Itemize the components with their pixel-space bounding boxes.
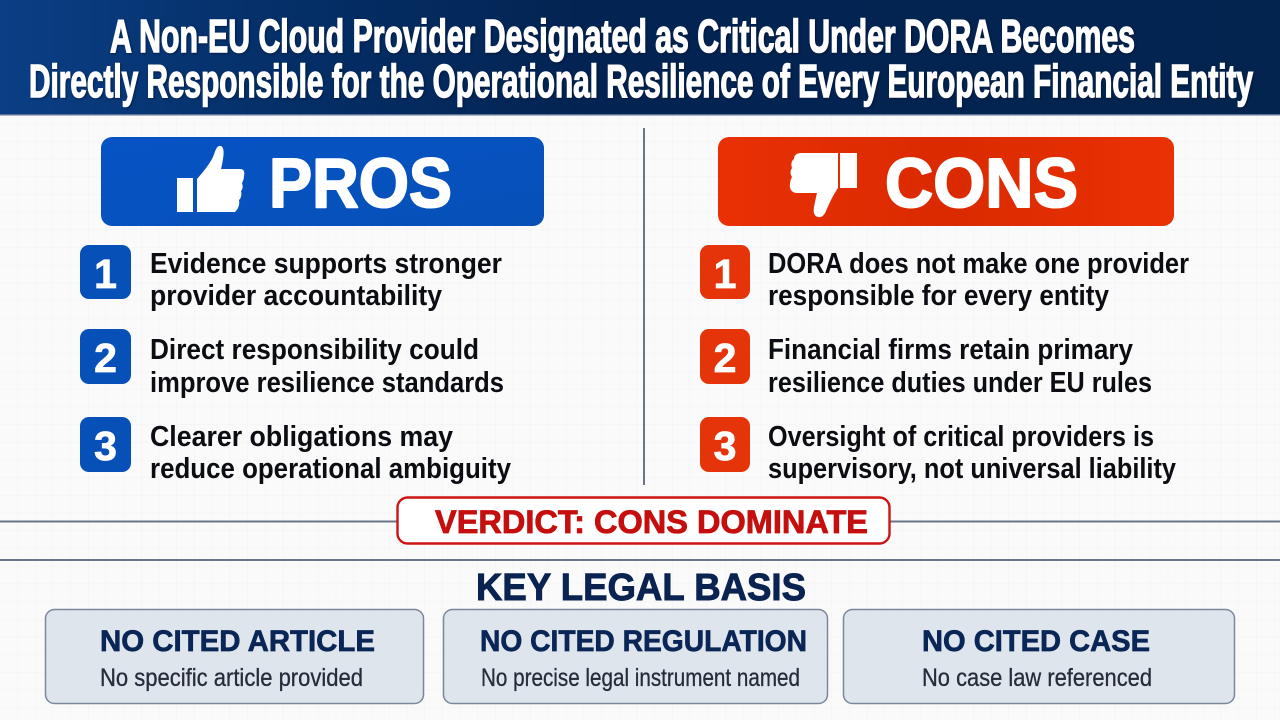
pro item 2: [80, 329, 504, 399]
panel: no cited case: [844, 610, 1234, 704]
pros heading: [101, 137, 544, 226]
con item 1: responsible for every entity: [768, 280, 1109, 312]
verdict callout: VERDICT: CONS DOMINATE: [435, 504, 868, 540]
panel: pros: [80, 137, 544, 485]
con item 1: [700, 245, 1189, 312]
con item 2: [700, 329, 1152, 399]
pro item 3: reduce operational ambiguity: [150, 453, 511, 485]
con item 1: DORA does not make one provider: [768, 248, 1189, 280]
con item 3: [700, 417, 1176, 485]
cons heading: [718, 137, 1174, 226]
pro item 3: [80, 417, 511, 485]
panel: no cited regulation: [444, 610, 828, 704]
con item 1: 1: [714, 251, 736, 297]
pro item 1: Evidence supports stronger: [150, 248, 502, 280]
panel: cons: [700, 137, 1189, 485]
panel: no cited article: No specific article provided: [100, 664, 363, 692]
pro item 3: 3: [94, 423, 117, 469]
pro item 2: Direct responsibility could: [150, 334, 479, 366]
cons label: CONS: [885, 144, 1078, 222]
title banner: [0, 0, 1280, 116]
con item 3: 3: [714, 423, 736, 469]
con item 2: Financial firms retain primary: [768, 334, 1133, 366]
verdict callout: [398, 498, 890, 544]
con item 3: supervisory, not universal liability: [768, 453, 1176, 485]
panel: no cited article: [46, 610, 424, 704]
pro item 1: [80, 245, 502, 312]
pro item 3: Clearer obligations may: [150, 421, 453, 453]
icon: thumbs down: [790, 153, 857, 217]
con item 3: Oversight of critical providers is: [768, 421, 1154, 453]
divider between pros and cons: [643, 128, 645, 485]
panel: no cited case: NO CITED CASE: [922, 625, 1150, 658]
pros label: PROS: [269, 144, 452, 222]
pro item 1: 1: [94, 251, 117, 297]
key legal basis heading: KEY LEGAL BASIS: [476, 567, 806, 609]
panel: no cited article: NO CITED ARTICLE: [100, 625, 375, 658]
pro item 1: provider accountability: [150, 280, 442, 312]
panel: no cited regulation: No precise legal instrument named: [481, 664, 800, 692]
pro item 2: 2: [94, 335, 117, 381]
panel: no cited regulation: NO CITED REGULATION: [480, 625, 807, 658]
icon: thumbs up: [177, 146, 244, 212]
con item 2: resilience duties under EU rules: [768, 367, 1152, 399]
pro item 2: improve resilience standards: [150, 367, 504, 399]
panel: no cited case: No case law referenced: [922, 664, 1152, 692]
con item 2: 2: [714, 335, 736, 381]
